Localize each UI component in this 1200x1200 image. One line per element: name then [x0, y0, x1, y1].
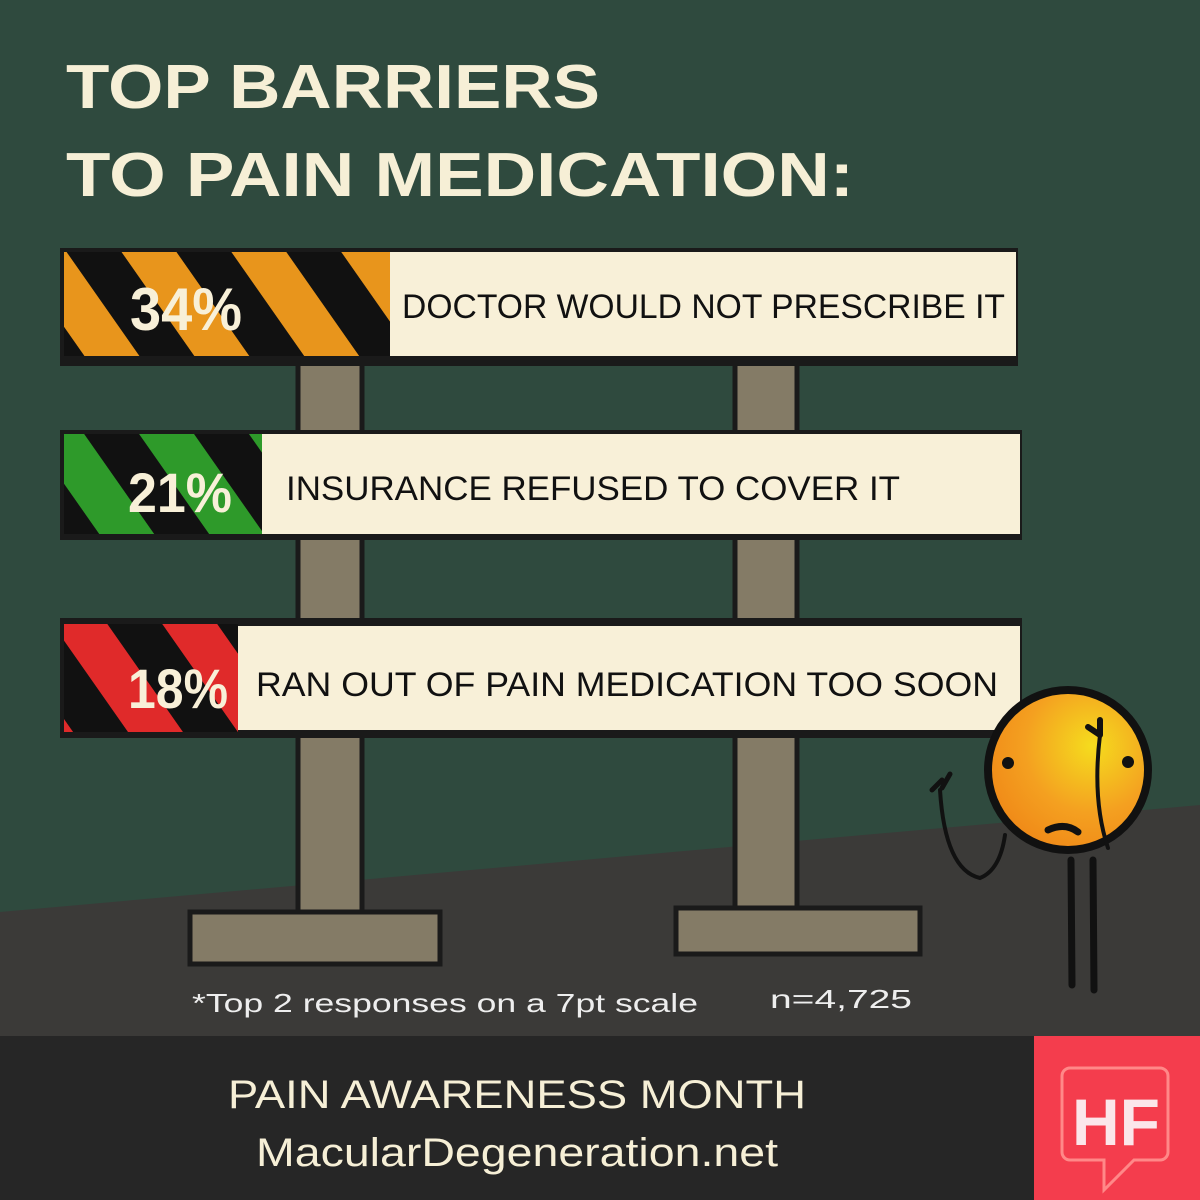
- bar 3: [60, 618, 1022, 738]
- posts: [190, 360, 920, 964]
- HF logo: HF: [1072, 1085, 1160, 1159]
- text: n=4,725: [770, 984, 912, 1014]
- floor: [0, 805, 1200, 1040]
- title: TO PAIN MEDICATION:: [66, 141, 854, 210]
- bar 2: 21%: [128, 461, 232, 524]
- bar 3: RAN OUT OF PAIN MEDICATION TOO SOON: [256, 666, 998, 704]
- footer text: PAIN AWARENESS MONTH: [228, 1073, 806, 1117]
- footer text: [228, 1073, 806, 1175]
- footer: [0, 1036, 1200, 1200]
- title: TOP BARRIERS: [66, 53, 600, 122]
- bar 2: [60, 430, 1022, 540]
- footnote: *Top 2 responses on a 7pt scale: [192, 988, 698, 1018]
- bar 1: 34%: [130, 276, 242, 343]
- bar 1: DOCTOR WOULD NOT PRESCRIBE IT: [402, 288, 1005, 326]
- character: [932, 690, 1148, 990]
- bar 3: 18%: [128, 657, 228, 720]
- title: [66, 53, 854, 210]
- HF logo: [1034, 1036, 1200, 1200]
- bar 2: INSURANCE REFUSED TO COVER IT: [286, 470, 900, 508]
- footer text: MacularDegeneration.net: [256, 1131, 778, 1175]
- bar 1: [60, 248, 1018, 366]
